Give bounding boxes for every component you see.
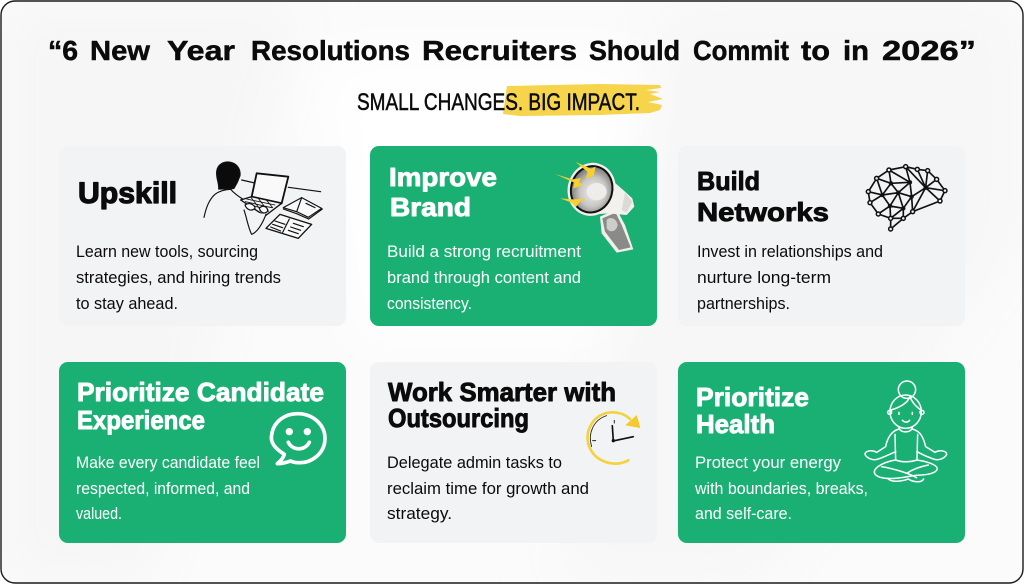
body text: Improve Brand: Build a strong recruitment xyxy=(387,242,581,261)
heading: Work Smarter with Outsourcing xyxy=(388,377,616,433)
title: “6 xyxy=(48,35,78,66)
body text: Prioritize Health: and self-care. xyxy=(695,504,792,523)
body text: Prioritize Candidate Experience: Make every candidate feel xyxy=(76,453,260,472)
panel: Work Smarter with Outsourcing xyxy=(370,362,657,543)
body text: Upskill: Learn new tools, sourcing xyxy=(76,242,258,261)
body text: Prioritize Health xyxy=(694,453,868,523)
body text: Build Networks xyxy=(697,242,883,313)
panel: Upskill xyxy=(59,146,346,326)
heading: Prioritize Candidate Experience xyxy=(77,377,324,435)
panel: Prioritize Candidate Experience xyxy=(59,362,346,543)
body text: Improve Brand xyxy=(387,242,581,313)
title: Recruiters xyxy=(422,35,577,66)
title: Should xyxy=(589,35,680,66)
panel: Build Networks xyxy=(678,146,965,326)
heading: Work Smarter with Outsourcing: Work Smarter with xyxy=(388,377,616,407)
body text: Prioritize Candidate Experience: valued. xyxy=(76,504,122,523)
panel: Improve Brand xyxy=(370,146,657,326)
heading: Upskill: Upskill xyxy=(78,177,177,210)
heading: Prioritize Health xyxy=(696,382,809,439)
body text: Build Networks: Invest in relationships and xyxy=(697,242,883,261)
heading: Improve Brand xyxy=(389,162,497,222)
body text: Upskill: strategies, and hiring trends xyxy=(76,268,281,287)
title: Resolutions xyxy=(251,35,410,66)
body text: Prioritize Health: Protect your energy xyxy=(695,453,841,472)
body text: Prioritize Candidate Experience: respected, informed, and xyxy=(76,479,250,498)
title xyxy=(48,35,976,66)
subtitle text: SMALL CHANGES. BIG IMPACT. xyxy=(357,89,640,116)
icon: person meditating xyxy=(865,381,947,482)
heading: Improve Brand: Brand xyxy=(390,192,471,222)
body text: Build Networks: partnerships. xyxy=(697,294,790,313)
body text: Work Smarter with Outsourcing: Delegate admin tasks to xyxy=(387,453,562,472)
title: to xyxy=(801,35,830,66)
icon: megaphone held in hand xyxy=(555,158,634,253)
icon: brain network xyxy=(866,165,947,231)
title: New xyxy=(90,35,150,66)
body text: Upskill xyxy=(76,242,281,313)
title: Commit xyxy=(693,35,789,66)
title: in xyxy=(843,35,869,66)
heading: Build Networks: Build xyxy=(697,166,760,196)
body text: Prioritize Health: with boundaries, breaks, xyxy=(694,479,868,498)
heading: Build Networks: Networks xyxy=(697,197,829,227)
title: 2026” xyxy=(882,35,976,66)
body text: Work Smarter with Outsourcing: reclaim time for growth and xyxy=(387,479,589,498)
body text: Improve Brand: brand through content and xyxy=(387,268,581,287)
body text: Upskill: to stay ahead. xyxy=(76,294,178,313)
heading: Work Smarter with Outsourcing: Outsourcing xyxy=(388,403,529,433)
body text: Build Networks: nurture long-term xyxy=(697,268,831,287)
panel: Prioritize Health xyxy=(678,362,965,543)
body text: Prioritize Candidate Experience xyxy=(76,453,260,523)
subtitle with yellow brush highlight xyxy=(357,84,663,116)
heading: Prioritize Candidate Experience: Prioritize Candidate xyxy=(77,377,324,407)
heading: Prioritize Candidate Experience: Experience xyxy=(77,405,205,435)
heading: Build Networks xyxy=(697,166,829,227)
body text: Work Smarter with Outsourcing: strategy. xyxy=(387,504,452,523)
heading: Improve Brand: Improve xyxy=(389,162,497,192)
heading: Prioritize Health: Prioritize xyxy=(696,382,809,412)
icon: clock with circular arrow xyxy=(588,412,640,464)
heading: Prioritize Health: Health xyxy=(696,409,775,439)
icon: smiling speech bubble xyxy=(271,414,325,464)
body text: Work Smarter with Outsourcing xyxy=(387,453,589,523)
page background xyxy=(24,28,254,556)
yellow brush stroke xyxy=(503,84,663,116)
title: Year xyxy=(167,35,235,66)
body text: Improve Brand: consistency. xyxy=(387,294,472,313)
icon: person working at laptop with books xyxy=(204,162,322,238)
